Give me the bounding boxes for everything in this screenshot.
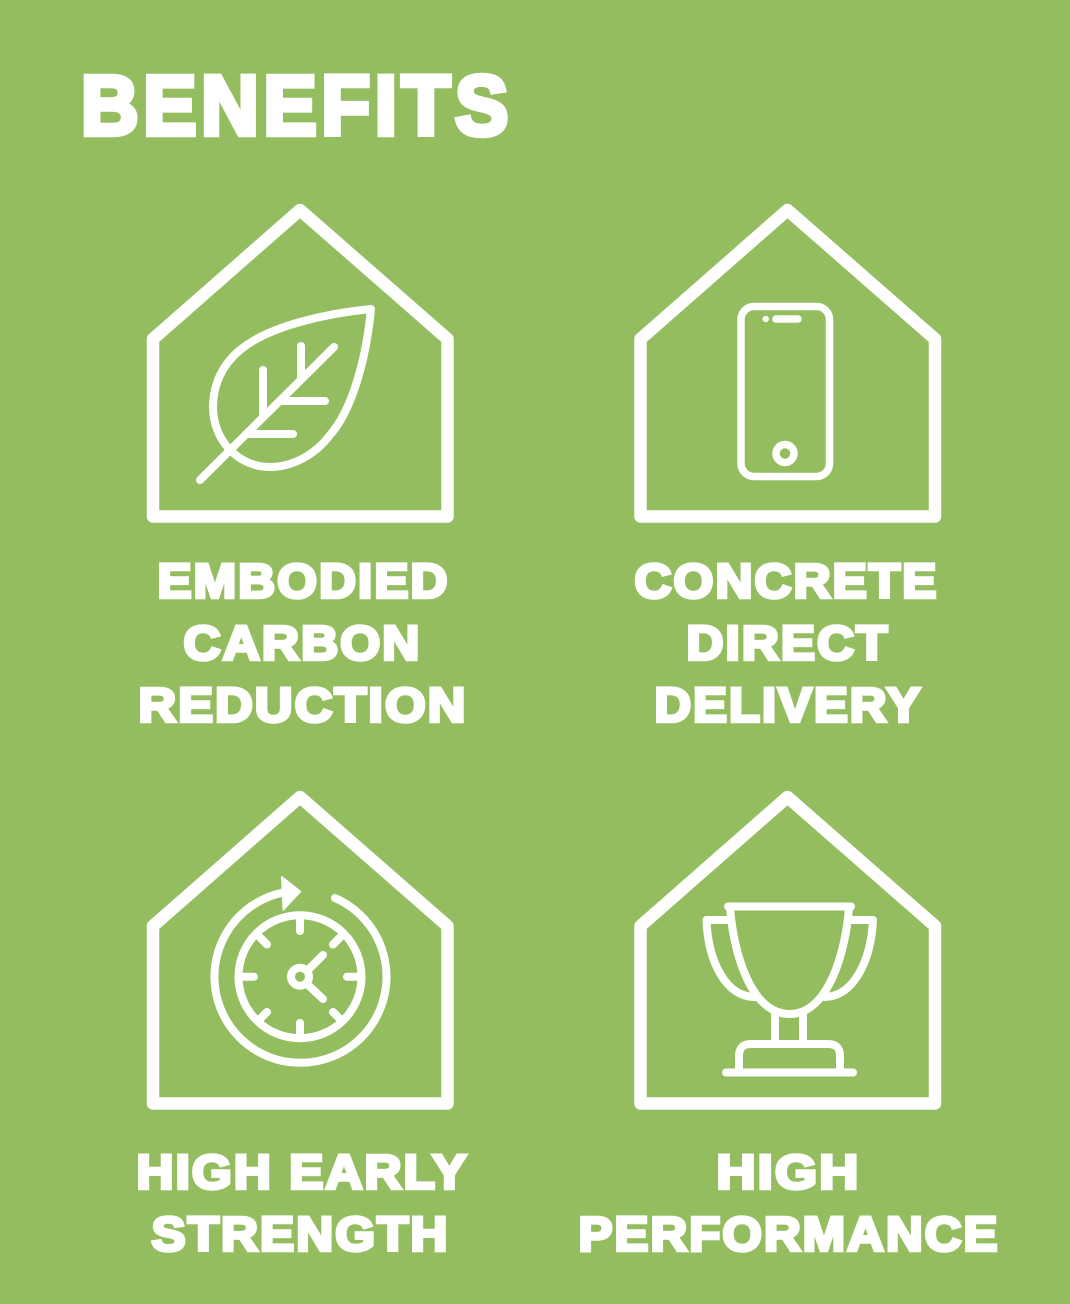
panel: concrete direct delivery xyxy=(634,210,938,732)
label: high early strength xyxy=(136,1146,468,1262)
label: embodied carbon reduction: REDUCTION xyxy=(138,680,468,732)
icon: house outline xyxy=(153,210,448,516)
icon: stopwatch with circular arrow xyxy=(214,877,386,1063)
icon: smartphone xyxy=(741,306,830,476)
label: concrete direct delivery: DIRECT xyxy=(686,618,890,670)
label: concrete direct delivery: CONCRETE xyxy=(634,556,938,608)
label: embodied carbon reduction xyxy=(138,556,468,732)
label: high performance xyxy=(578,1146,1000,1262)
icon: leaf xyxy=(200,309,371,480)
icon: house outline xyxy=(640,210,935,516)
panel: high early strength xyxy=(136,797,468,1262)
label: high early strength: HIGH EARLY xyxy=(136,1146,468,1200)
icon: house outline xyxy=(640,797,935,1104)
title: BENEFITS xyxy=(81,58,513,152)
icon: trophy xyxy=(706,906,873,1072)
label: high early strength: STRENGTH xyxy=(152,1208,450,1262)
label: high performance: PERFORMANCE xyxy=(578,1208,1000,1262)
label: embodied carbon reduction: CARBON xyxy=(184,618,422,670)
label: concrete direct delivery xyxy=(634,556,938,732)
label: high performance: HIGH xyxy=(716,1146,860,1200)
panel: embodied carbon reduction xyxy=(138,210,468,732)
label: embodied carbon reduction: EMBODIED xyxy=(158,556,450,608)
icon: house outline xyxy=(153,797,448,1104)
label: concrete direct delivery: DELIVERY xyxy=(654,680,922,732)
panel: high performance xyxy=(578,797,1000,1262)
